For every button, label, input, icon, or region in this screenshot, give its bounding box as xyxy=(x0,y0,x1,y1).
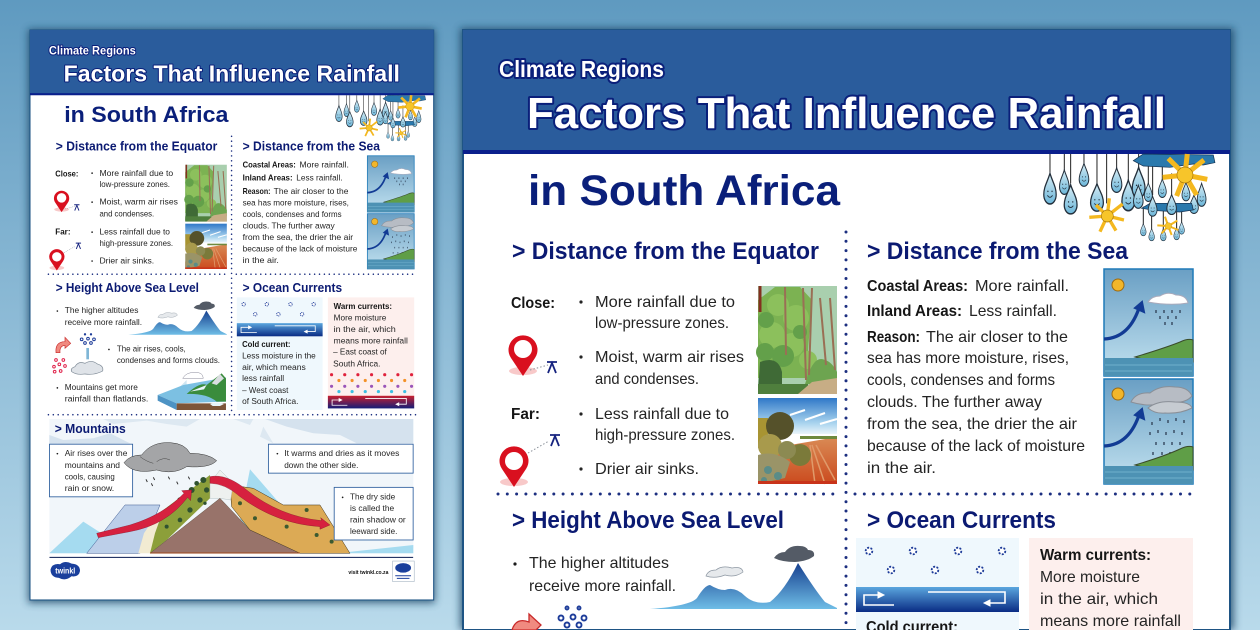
explanation text: More rainfall. xyxy=(975,278,1069,295)
explanation text: The air closer to the xyxy=(274,186,349,196)
panel: distance from the equator xyxy=(49,140,227,271)
bullet text: altitudes xyxy=(513,555,676,595)
panel: mountains xyxy=(49,419,413,553)
sheet paper xyxy=(30,30,434,600)
explanation text: Coastal Areas: xyxy=(867,278,968,295)
warm current text: Warm currents: xyxy=(1040,547,1151,564)
warm current text xyxy=(333,301,408,368)
image: forest xyxy=(184,165,227,222)
bullet list: and condenses. xyxy=(595,371,699,388)
callout: warms and dries: It warms and dries as it moves xyxy=(284,448,399,458)
bullet list: Moist, warm air rises xyxy=(99,197,178,207)
callout: rain shadow xyxy=(334,487,413,540)
panel: height above sea level xyxy=(53,281,227,410)
explanation text xyxy=(243,159,358,265)
heading: Climate Regions: Climate Regions xyxy=(49,44,136,58)
bullet text: air rises xyxy=(108,344,220,365)
far label: Far: xyxy=(511,406,540,423)
explanation text: The air closer to the xyxy=(926,329,1068,346)
bullet list: low-pressure zones. xyxy=(99,179,170,189)
image: savanna xyxy=(758,398,837,484)
heading: > Mountains xyxy=(55,422,126,436)
bullet text: altitudes: receive more rainfall. xyxy=(65,317,142,327)
warm current graphic xyxy=(328,373,414,408)
icon: rising air arrow (cropped) xyxy=(512,614,541,630)
icon: raindrops and suns decoration xyxy=(1044,154,1215,241)
bullet list: More rainfall due to xyxy=(595,294,735,311)
far label: Far: xyxy=(55,227,71,237)
image: coast light rain xyxy=(1104,269,1193,376)
image: coast heavy rain xyxy=(1104,379,1193,484)
close label: Close: xyxy=(55,168,78,178)
cold current box background xyxy=(237,297,323,410)
bullet list: low-pressure zones. xyxy=(595,315,729,332)
footer with logo xyxy=(49,557,414,582)
dotted dividers xyxy=(48,136,416,415)
bullet list: Drier air sinks. xyxy=(595,461,699,478)
cold current text: of South Africa. xyxy=(242,396,298,406)
warm current text: in the air, which xyxy=(334,324,396,334)
bullet text: mountains xyxy=(57,382,148,404)
cold current graphic xyxy=(856,548,1019,612)
cold current text xyxy=(242,339,316,406)
panel: distance from the sea xyxy=(867,238,1193,484)
bullet text: altitudes xyxy=(57,305,142,327)
bullet text: altitudes: receive more rainfall. xyxy=(529,578,676,595)
cold current text: Cold current: xyxy=(242,339,291,349)
warm current text: means more rainfall xyxy=(334,336,408,346)
icon: close pin xyxy=(508,335,557,376)
cold current text: less rainfall xyxy=(242,373,284,383)
bullet text: air rises: The air rises, cools, xyxy=(117,344,186,354)
bullet list: Less rainfall due to xyxy=(99,227,170,237)
callout: air rises: mountains and xyxy=(65,460,120,470)
heading: Climate Regions: Climate Regions xyxy=(499,56,664,82)
title continuation: in South Africa: in South Africa xyxy=(64,102,229,127)
callout: air rises: Air rises over the xyxy=(65,448,128,458)
explanation text: cools, condenses and forms xyxy=(243,209,342,219)
bullet list: Drier air sinks. xyxy=(99,256,154,266)
icon: rain cloud over callout xyxy=(124,443,217,486)
warm current text: in the air, which xyxy=(1040,591,1158,608)
bullet text: altitudes: The higher altitudes xyxy=(65,305,138,315)
explanation text: Reason: xyxy=(867,329,920,346)
cold current box background xyxy=(856,538,1019,630)
cold current text: air, which means xyxy=(242,362,306,372)
callout: warms and dries xyxy=(268,444,413,473)
warm current text: South Africa. xyxy=(333,358,381,368)
dotted dividers xyxy=(498,232,1196,629)
icon: water droplets (cropped) xyxy=(558,606,586,628)
warm current text: – East coast of xyxy=(333,347,387,357)
explanation text: sea has more moisture, rises, xyxy=(867,350,1069,367)
warm current box background xyxy=(1029,538,1193,630)
panel: distance from the sea xyxy=(243,140,414,269)
bullet list: Less rainfall due to xyxy=(595,406,729,423)
explanation text: sea has more moisture, rises, xyxy=(243,197,349,207)
icon: far pin xyxy=(500,435,560,487)
callout: rain shadow: leeward side. xyxy=(350,526,397,536)
image: coast heavy rain xyxy=(367,214,414,269)
explanation text: More rainfall. xyxy=(299,159,349,169)
panel: ocean currents xyxy=(237,281,414,410)
title: Factors That Influence Rainfall: Factors That Influence Rainfall xyxy=(527,89,1166,138)
bullet list xyxy=(579,294,744,478)
callout: warms and dries: down the other side. xyxy=(284,460,358,470)
explanation text: clouds. The further away xyxy=(243,220,336,230)
panel: height above sea level xyxy=(512,507,837,630)
callout: air rises xyxy=(49,444,133,497)
icon: raindrops and suns decoration xyxy=(336,95,426,141)
image: mountains with clouds xyxy=(128,302,227,335)
heading: > Distance from the Equator xyxy=(56,140,217,154)
explanation text: Coastal Areas: xyxy=(243,159,296,169)
panel: left thumbnail sheet xyxy=(30,30,434,600)
title: Factors That Influence Rainfall: Factors That Influence Rainfall xyxy=(64,61,400,87)
illustration: rain shadow mountain xyxy=(49,419,413,553)
explanation text: in the air. xyxy=(243,255,279,265)
warm current text xyxy=(1040,547,1181,630)
icon: far pin xyxy=(49,243,81,271)
explanation text xyxy=(867,278,1085,477)
bullet list: More rainfall due to xyxy=(99,168,173,178)
heading: > Ocean Currents xyxy=(243,281,342,295)
image: forest xyxy=(756,286,837,394)
explanation text: in the air. xyxy=(867,460,936,477)
heading: > Ocean Currents xyxy=(867,507,1056,534)
warm current text: More moisture xyxy=(1040,569,1140,586)
explanation text: Inland Areas: xyxy=(867,303,962,320)
callout: rain shadow: rain shadow or xyxy=(350,515,406,525)
explanation text: Less rainfall. xyxy=(969,303,1057,320)
explanation text: cools, condenses and forms xyxy=(867,372,1055,389)
cold current text: – West coast xyxy=(242,385,289,395)
bullet text: mountains: rainfall than flatlands. xyxy=(65,394,148,404)
bullet text: mountains: Mountains get more xyxy=(65,382,138,392)
icon: close pin xyxy=(54,191,79,212)
cold current text: Less moisture in the xyxy=(242,350,316,360)
image: savanna xyxy=(185,224,227,269)
heading: > Height Above Sea Level xyxy=(512,507,784,534)
explanation text: because of the lack of moisture xyxy=(867,438,1085,455)
header band xyxy=(30,30,434,95)
heading: > Distance from the Equator xyxy=(512,238,819,265)
bullet list: and condenses. xyxy=(99,208,154,218)
warm current text: Warm currents: xyxy=(334,301,392,311)
title continuation: in South Africa: in South Africa xyxy=(528,167,841,215)
warm current text: means more rainfall xyxy=(1040,613,1181,630)
explanation text: from the sea, the drier the air xyxy=(243,232,353,242)
bullet list: Moist, warm air rises xyxy=(595,349,744,366)
image: mountains with clouds xyxy=(650,546,837,609)
image: coast light rain xyxy=(367,156,414,212)
heading: > Distance from the Sea xyxy=(867,238,1129,265)
cold current graphic xyxy=(237,302,323,336)
explanation text: Less rainfall. xyxy=(296,173,343,183)
callout: rain shadow: The dry side xyxy=(350,491,396,501)
bullet list: high-pressure zones. xyxy=(595,427,735,444)
close label: Close: xyxy=(511,295,555,312)
bullet text: air rises: condenses and forms clouds. xyxy=(117,355,220,365)
icon: evaporation cycle xyxy=(53,333,103,374)
callout: rain shadow: is called the xyxy=(350,503,395,513)
panel: ocean currents xyxy=(856,507,1193,630)
panel: enlarged sheet xyxy=(463,30,1230,630)
sheet paper xyxy=(463,30,1230,630)
heading: > Height Above Sea Level xyxy=(56,281,199,295)
heading: > Distance from the Sea xyxy=(243,140,381,154)
explanation text: because of the lack of moisture xyxy=(243,244,358,254)
bullet list: high-pressure zones. xyxy=(99,238,173,248)
explanation text: from the sea, the drier the air xyxy=(867,416,1078,433)
warm current box background xyxy=(328,297,414,408)
header band xyxy=(463,30,1230,154)
explanation text: Reason: xyxy=(243,186,271,196)
callout: air rises: rain or snow. xyxy=(65,483,114,493)
explanation text: Inland Areas: xyxy=(243,173,293,183)
bullet text: altitudes: The higher altitudes xyxy=(529,555,669,572)
image: land block xyxy=(158,373,226,410)
callout: air rises: cools, causing xyxy=(65,471,115,481)
explanation text: clouds. The further away xyxy=(867,394,1042,411)
bullet list xyxy=(91,168,178,266)
warm current text: More moisture xyxy=(334,313,387,323)
panel: distance from the equator xyxy=(500,238,837,487)
